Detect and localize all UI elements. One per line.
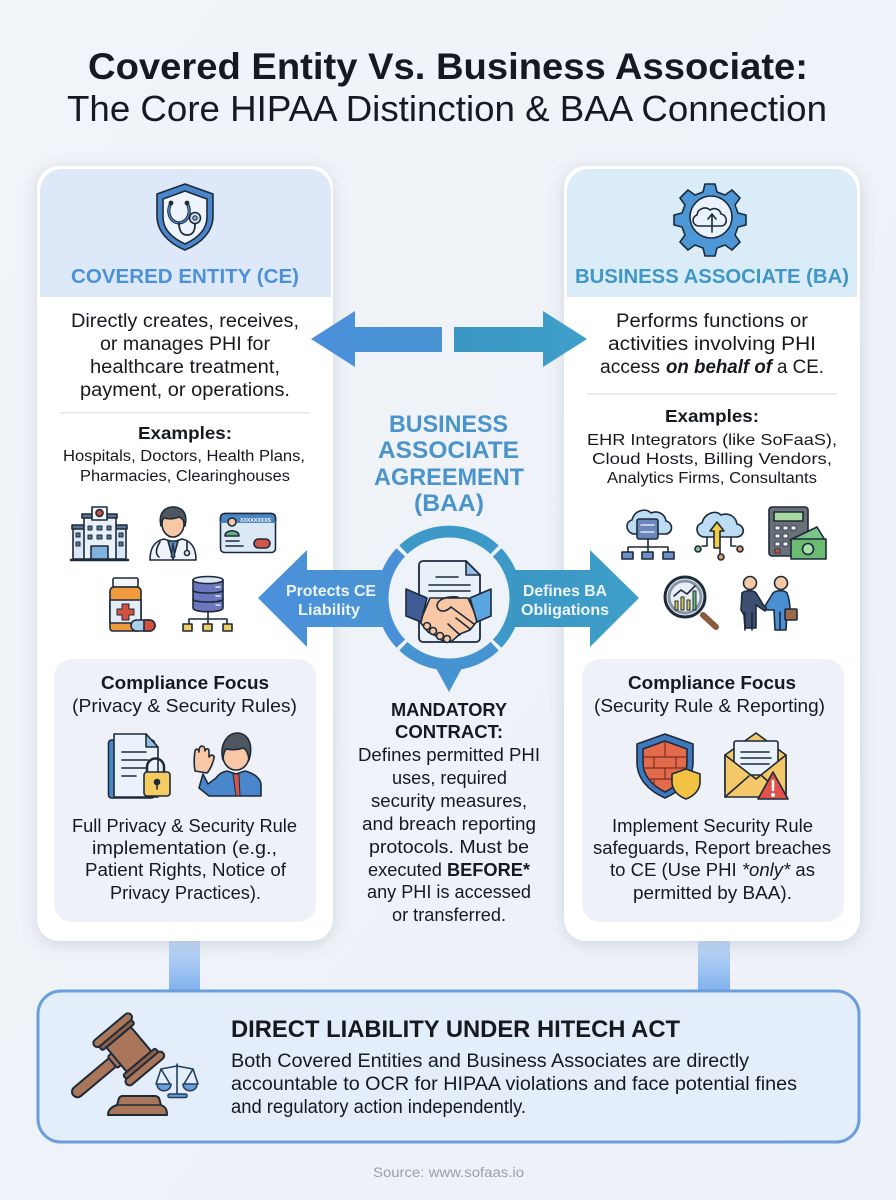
icon: gear with cloud upload: [674, 184, 746, 256]
connector: covered entity to liability box: [169, 938, 200, 992]
text: liability heading and explanation: [231, 1016, 797, 1118]
icon: doctor: [150, 507, 196, 560]
text: covered entity compliance details: Patient Rights, Notice of: [85, 860, 287, 880]
heading: business associate agreement: (BAA): [414, 490, 484, 517]
text: covered entity definition: Directly creates, receives,: [71, 311, 299, 332]
text: business associate examples: Analytics Firms, Consultants: [607, 470, 817, 487]
panel: direct liability under HITECH act: [38, 991, 859, 1142]
icon: envelope with warning: [725, 733, 788, 799]
text: business associate compliance details: safeguards, Report breaches: [593, 838, 831, 858]
panel: covered entity compliance focus: [54, 659, 316, 922]
text: business associate definition: activities involving PHI: [608, 334, 816, 355]
arrow: top left: [311, 311, 442, 367]
icon: insurance ID card: [220, 514, 276, 552]
text: business associate compliance details: permitted by BAA).: [633, 883, 792, 903]
text: covered entity compliance details: implementation (e.g.,: [92, 838, 277, 858]
text: liability heading and explanation: DIRECT LIABILITY UNDER HITECH ACT: [231, 1016, 680, 1043]
icon: person with raised hand: [194, 733, 261, 796]
text: business associate examples: [587, 406, 837, 487]
icon: firewall shield: [637, 734, 700, 799]
icon: pill bottle: [110, 578, 155, 631]
ring segments: [383, 532, 515, 664]
icon: shield with stethoscope: [157, 184, 213, 250]
icon: calculator and cash: [769, 507, 826, 559]
arrow: protects covered entity liability: Liability: [298, 602, 360, 619]
text: business associate compliance details: Implement Security Rule: [612, 816, 813, 836]
icon: gavel and scales: [55, 1012, 198, 1118]
text: business associate examples: Cloud Hosts, Billing Vendors,: [592, 451, 832, 468]
arrow: defines business associate obligations: Defines BA: [523, 583, 607, 600]
text: business associate definition: on behalf of: [666, 357, 774, 378]
text: covered entity examples: Hospitals, Doctors, Health Plans,: [63, 448, 305, 465]
connector: business associate to liability box: [698, 938, 730, 992]
heading: business associate agreement: ASSOCIATE: [378, 437, 519, 464]
panel header: business associate: [567, 169, 857, 297]
text: covered entity definition: healthcare treatment,: [90, 357, 280, 378]
heading: business associate agreement: AGREEMENT: [374, 464, 524, 491]
arrow: defines business associate obligations: [512, 550, 639, 647]
title: The Core HIPAA Distinction & BAA Connection: [67, 88, 827, 129]
text: business associate definition: a CE.: [777, 357, 824, 378]
ring pointer: [436, 668, 462, 692]
icon: database network: [183, 576, 232, 631]
icon: magnifier with chart: [665, 577, 716, 627]
text: mandatory contract: uses, required: [392, 768, 507, 788]
text: mandatory contract: executed BEFORE*: [368, 860, 530, 880]
text: covered entity examples: [63, 423, 305, 485]
heading: covered entity compliance focus: (Privacy & Security Rules): [72, 696, 297, 716]
heading: business associate agreement: [374, 411, 524, 517]
icon: document with padlock: [108, 734, 170, 798]
text: liability heading and explanation: and regulatory action independently.: [231, 1097, 526, 1118]
text: covered entity examples: Examples:: [138, 423, 232, 443]
text: mandatory contract: [358, 700, 540, 925]
source note: Source: www.sofaas.io: [373, 1165, 524, 1180]
text: covered entity definition: or manages PHI for: [100, 334, 271, 355]
icon: cloud upload nodes: [695, 512, 743, 560]
heading: business associate compliance focus: (Security Rule & Reporting): [594, 696, 825, 716]
text: covered entity compliance details: Privacy Practices).: [110, 883, 261, 903]
text: mandatory contract: CONTRACT:: [395, 722, 503, 742]
text: mandatory contract: security measures,: [371, 791, 527, 811]
text: mandatory contract: and breach reporting: [362, 814, 536, 834]
text: covered entity examples: Pharmacies, Clearinghouses: [80, 468, 290, 485]
arrow: protects covered entity liability: Protects CE: [286, 583, 376, 600]
text: business associate definition: access: [600, 357, 660, 378]
text: business associate definition: [600, 311, 824, 378]
text: business associate examples: Examples:: [665, 406, 759, 426]
heading: business associate compliance focus: [594, 673, 825, 716]
title: Covered Entity Vs. Business Associate:: [88, 46, 808, 87]
heading: covered entity compliance focus: [72, 673, 297, 716]
icon: contract with handshake: [406, 561, 491, 642]
icon: business people shaking hands: [741, 576, 797, 630]
diagram: BAA handshake hub: [258, 532, 639, 692]
text: liability heading and explanation: accountable to OCR for HIPAA violations and face potential fines: [231, 1074, 797, 1095]
text: covered entity definition: [71, 311, 299, 401]
panel header: covered entity: [40, 169, 331, 297]
heading: business associate compliance focus: Compliance Focus: [628, 673, 796, 693]
arrow: defines business associate obligations: Obligations: [521, 602, 609, 619]
heading: business associate agreement: BUSINESS: [389, 411, 508, 438]
text: business associate compliance details: to CE (Use PHI *only* as: [610, 860, 815, 880]
heading: covered entity compliance focus: Compliance Focus: [101, 673, 269, 693]
panel: business associate: [564, 166, 860, 941]
title: [67, 46, 827, 129]
heading: business associate: BUSINESS ASSOCIATE (BA): [575, 266, 849, 288]
hub disc: [388, 538, 510, 658]
text: covered entity definition: payment, or operations.: [80, 380, 290, 401]
panel: business associate compliance focus: [582, 659, 844, 922]
arrow: protects covered entity liability: [258, 550, 385, 647]
text: business associate compliance details: [593, 816, 831, 903]
text: covered entity compliance details: [72, 816, 297, 903]
icon: insurance ID card: XXXXXXXXS: [240, 518, 271, 524]
icon: cloud server network: [622, 510, 674, 559]
arrow: top right: [454, 311, 587, 367]
text: mandatory contract: Defines permitted PHI: [358, 745, 540, 765]
text: covered entity compliance details: Full Privacy & Security Rule: [72, 816, 297, 836]
heading: covered entity: COVERED ENTITY (CE): [71, 266, 299, 288]
text: mandatory contract: MANDATORY: [391, 700, 507, 720]
text: mandatory contract: or transferred.: [392, 905, 506, 925]
panel: covered entity: [37, 166, 333, 941]
text: business associate examples: EHR Integrators (like SoFaaS),: [587, 432, 837, 449]
text: mandatory contract: any PHI is accessed: [367, 882, 531, 902]
icon: hospital: [71, 507, 128, 560]
text: liability heading and explanation: Both Covered Entities and Business Associates are directly: [231, 1051, 750, 1072]
text: business associate definition: Performs functions or: [616, 311, 809, 332]
text: mandatory contract: protocols. Must be: [369, 837, 529, 857]
